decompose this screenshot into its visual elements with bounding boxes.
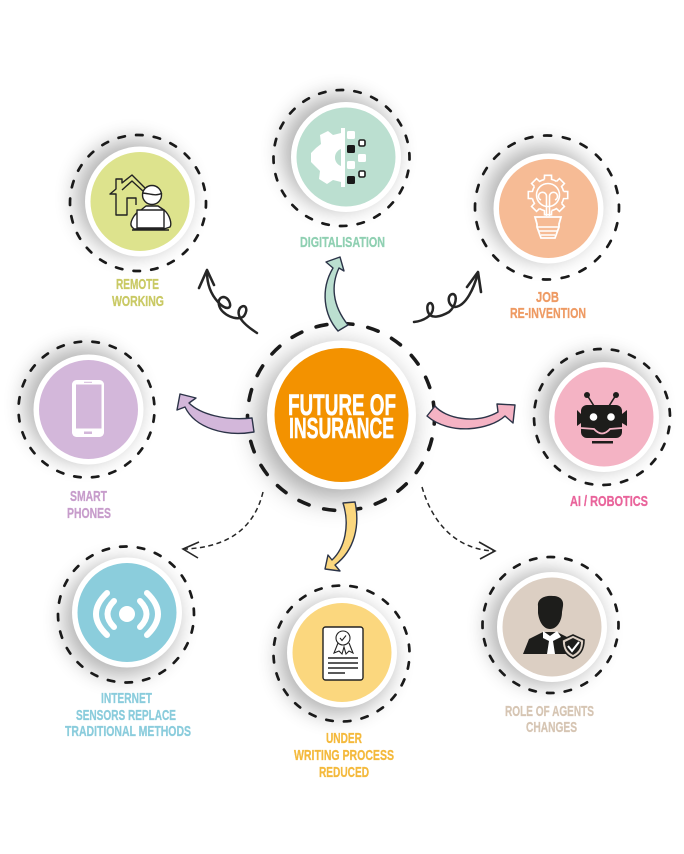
title [288,389,396,445]
icon: certificate [323,627,363,680]
arrow: to ai robotics [427,404,515,429]
arrow: curly to job re-invention [414,272,481,322]
node: job re-invention [475,136,619,322]
arrow: dashed to internet sensors [183,492,263,558]
label: ROLE OF AGENTS [505,703,594,720]
label [510,289,586,322]
label: JOB [536,289,559,306]
label [65,690,191,740]
node: digitalisation [274,90,410,251]
node: ai / robotics [534,349,670,510]
arrow: curly to remote working [199,270,257,333]
arrow: to smart phones [177,394,254,433]
node: internet sensors [58,546,194,740]
node: role of agents [482,557,618,736]
icon: half gear and data bits [311,128,366,187]
label [67,488,111,522]
label [505,703,594,736]
node: remote working [70,135,206,310]
label: REMOTE [116,276,159,293]
icon: smartphone [72,380,104,437]
arrow: to underwriting [325,502,357,571]
icon: light bulb gear in pot [528,175,568,238]
icon: sensor waves [96,593,158,635]
label: CHANGES [526,719,577,736]
label: UNDER [326,730,362,747]
arrow: dashed to role of agents [422,487,495,559]
icon: agent with shield [523,596,584,658]
node: underwriting process [274,586,410,781]
label: REDUCED [319,764,369,781]
label: SMART [70,488,107,505]
node: smart phones [18,342,154,522]
node: central future of insurance [248,324,434,510]
label: AI / ROBOTICS [570,493,648,510]
label: DIGITALISATION [300,234,385,251]
label [294,730,394,781]
label: PHONES [67,505,111,522]
label: SENSORS REPLACE [76,707,176,724]
label [112,276,164,310]
icon: house and person at laptop [110,175,171,230]
label: WRITING PROCESS [294,747,394,764]
label: TRADITIONAL METHODS [65,723,191,740]
icon: robot head [577,392,627,444]
arrow: to digitalisation [325,257,348,331]
label: WORKING [112,293,164,310]
label: INTERNET [101,690,152,707]
title: FUTURE OF [288,389,396,422]
title: INSURANCE [289,413,394,445]
label: RE-INVENTION [510,305,586,322]
